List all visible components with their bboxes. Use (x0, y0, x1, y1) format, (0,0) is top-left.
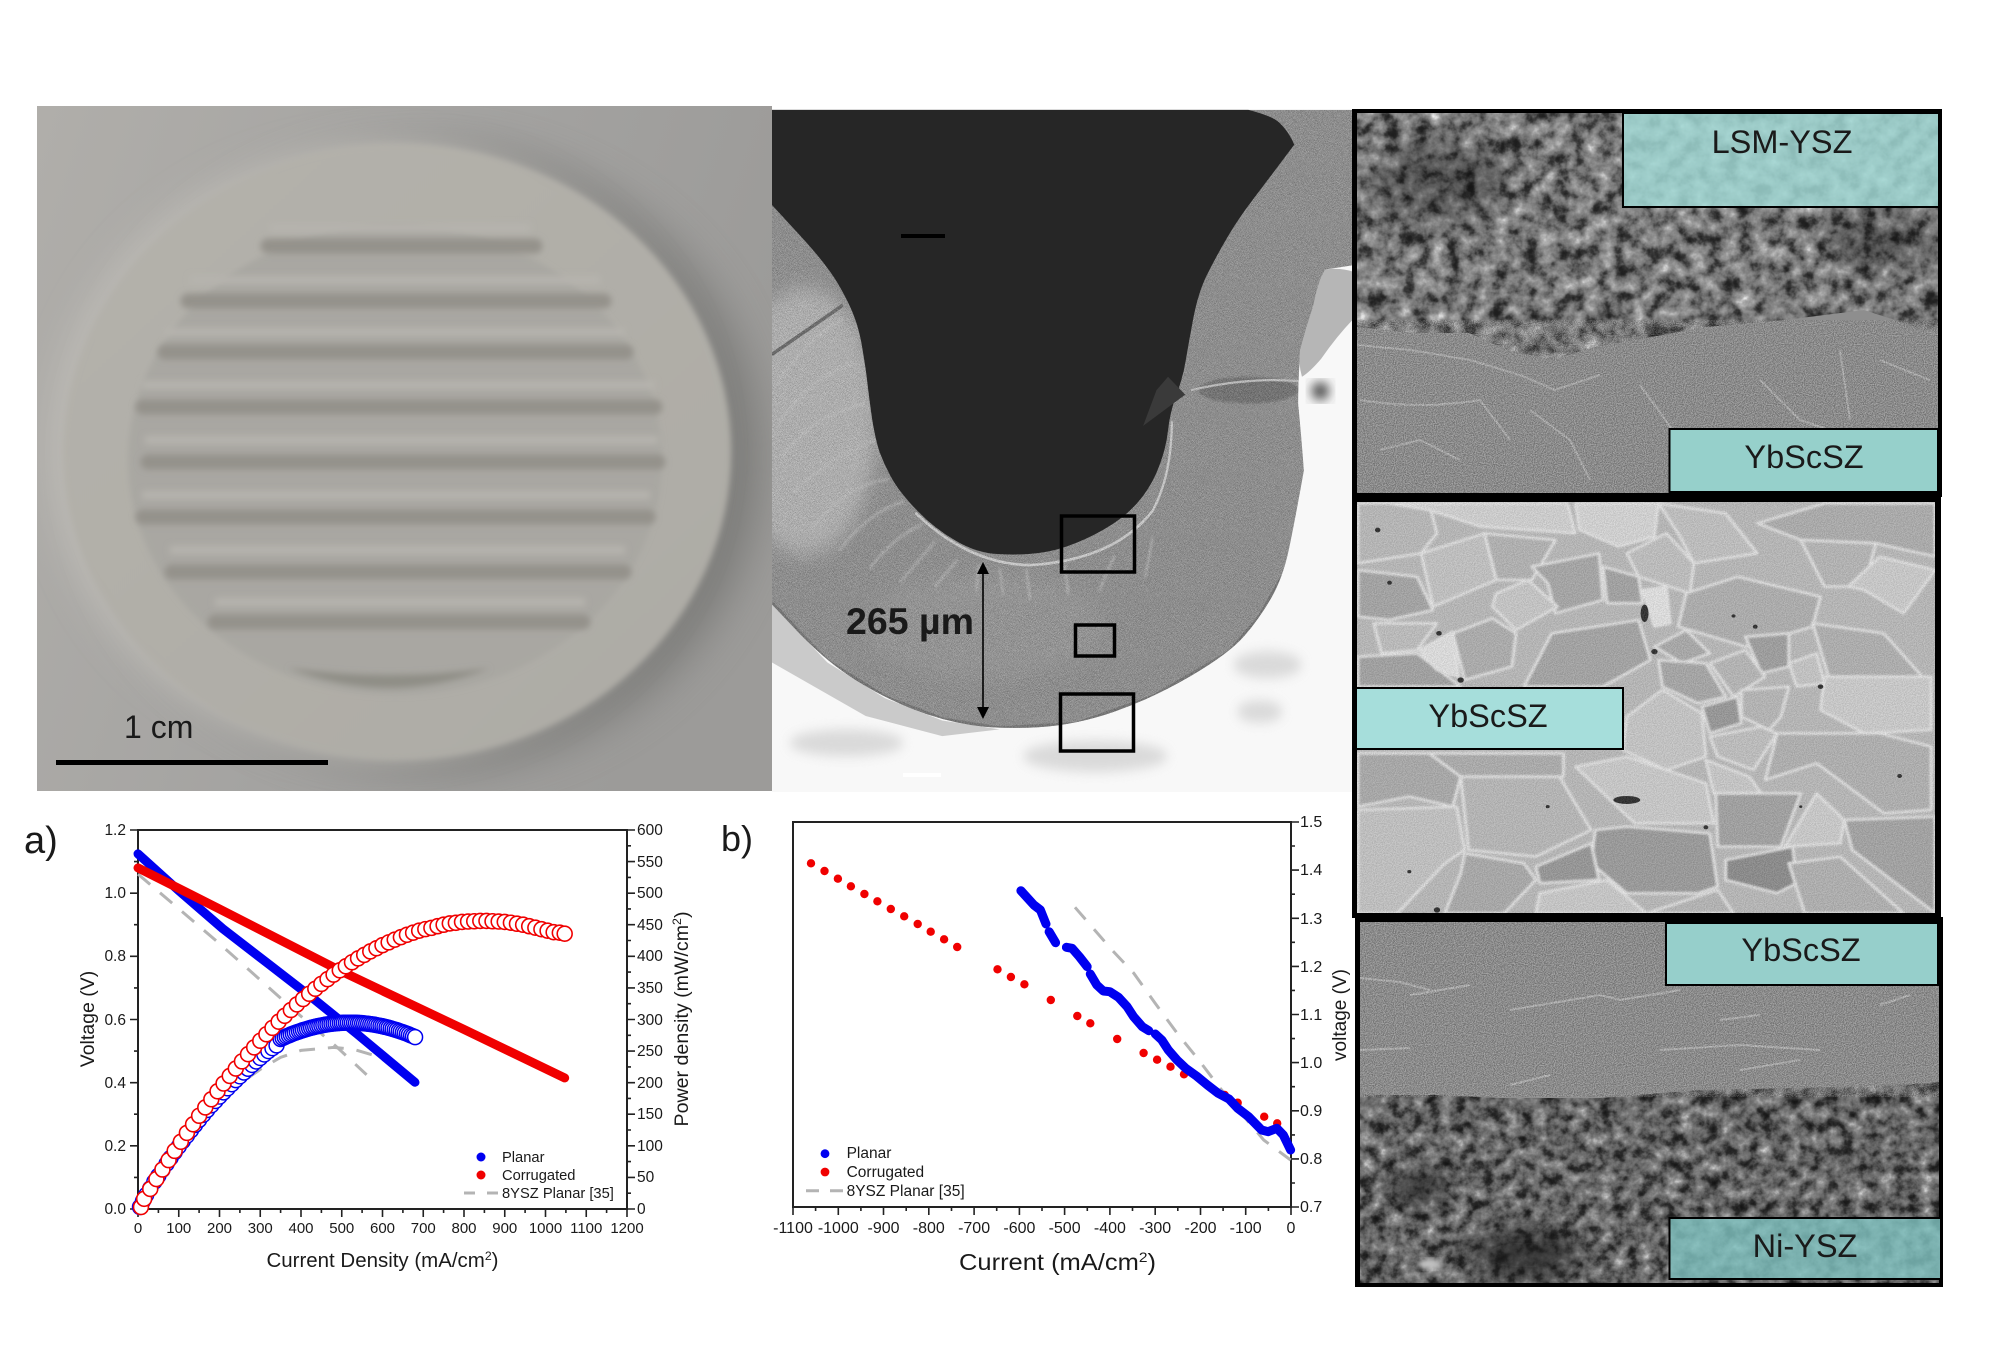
recessed corrugated area (128, 225, 662, 695)
bottom axis labels: 900 (492, 1220, 517, 1237)
gray dashed reference curve (1075, 907, 1291, 1160)
shadowed patches in cathode (1370, 140, 1935, 270)
right axis labels: 0.7 (1300, 1199, 1322, 1216)
bottom axis labels: -300 (1139, 1220, 1171, 1237)
right axis title: 2 (670, 918, 684, 925)
dark channel (772, 110, 1294, 554)
bottom axis labels (134, 1220, 644, 1237)
dense electrolyte (1357, 310, 1938, 493)
bottom axis labels: 100 (166, 1220, 191, 1237)
bottom axis labels: 500 (329, 1220, 354, 1237)
legend: Planar (502, 1150, 545, 1166)
bottom axis labels: 0 (134, 1220, 142, 1237)
right axis labels: 0 (637, 1201, 646, 1218)
thickness dimension arrow (977, 562, 989, 719)
brightening veil (1357, 502, 1935, 913)
disc left glow (45, 140, 715, 760)
corrugation grooves (143, 246, 658, 622)
label: YbScSZ middle: YbScSZ (1428, 698, 1548, 734)
charging spot (1311, 383, 1330, 399)
bright grains near anode base (1416, 1259, 1444, 1269)
left axis labels: 1.0 (104, 885, 126, 902)
thickness label: 265 µm (846, 600, 974, 642)
bottom axis title: 2 (485, 1249, 492, 1263)
red power curve (141, 921, 565, 1207)
data series (138, 854, 565, 1209)
right axis title: ) (672, 912, 693, 918)
right axis labels: 500 (637, 885, 663, 902)
chart b: voltage vs current (773, 814, 1351, 1275)
legend: 8YSZ Planar [35] (502, 1186, 614, 1202)
axis ticks (130, 830, 635, 1217)
right axis labels: 250 (637, 1043, 663, 1060)
right axis labels: 1.5 (1300, 814, 1322, 831)
bottom axis title: Current (mA/cm (959, 1249, 1121, 1275)
label: LSM-YSZ: LSM-YSZ (1712, 124, 1852, 160)
left axis labels: 0.0 (104, 1201, 126, 1218)
panel: YbScSZ / Ni-YSZ interface micrograph (1355, 917, 1943, 1287)
bottom axis labels: 0 (1287, 1220, 1296, 1237)
left axis labels (104, 822, 126, 1218)
right axis labels: 1.1 (1300, 1007, 1322, 1024)
scale bar (56, 760, 328, 765)
right axis labels: 150 (637, 1106, 663, 1123)
chart a: voltage and power density vs current density (77, 822, 693, 1272)
electrolyte lines (1360, 978, 1910, 1085)
left axis labels: 1.2 (104, 822, 126, 839)
blue power curve (140, 1023, 415, 1207)
dark pockets in anode (1392, 1176, 1579, 1277)
bottom axis labels: 1000 (529, 1220, 562, 1237)
left axis labels: 0.6 (104, 1012, 126, 1029)
bottom axis labels: 400 (288, 1220, 314, 1237)
left axis title: Voltage (V) (77, 971, 99, 1067)
heading: b): b) (721, 818, 753, 859)
scale label: 1 cm (124, 709, 193, 745)
right axis labels: 300 (637, 1012, 663, 1029)
right axis labels (637, 822, 663, 1218)
label: YbScSZ lower (1666, 923, 1938, 985)
fracture pores (1375, 528, 1902, 913)
right axis labels: 0.8 (1300, 1151, 1322, 1168)
legend (806, 1145, 965, 1200)
right axis labels: 600 (637, 822, 663, 839)
bottom axis labels: -600 (1003, 1220, 1036, 1237)
legend: Corrugated (502, 1168, 575, 1184)
bottom axis title: ) (492, 1250, 498, 1272)
label: Ni-YSZ: Ni-YSZ (1753, 1228, 1857, 1264)
bottom axis labels: -100 (1230, 1220, 1262, 1237)
axis ticks (793, 822, 1299, 1215)
fracture flake (1299, 269, 1354, 377)
panel: SEM cross-section of corrugation (732, 100, 1356, 792)
right axis labels: 200 (637, 1075, 663, 1092)
blue planar points (1021, 891, 1291, 1150)
polyhedral grains (1358, 503, 1935, 913)
inset marker boxes (1060, 516, 1134, 751)
right axis title: voltage (V) (1330, 969, 1351, 1061)
legend (464, 1150, 614, 1202)
right axis title: Power density (mW/cm (672, 931, 693, 1126)
right axis labels: 0.9 (1300, 1103, 1322, 1120)
label: YbScSZ lower: YbScSZ (1741, 932, 1861, 968)
black scale bar on SEM (901, 234, 945, 238)
label: LSM-YSZ (1623, 113, 1939, 207)
bottom axis labels: -800 (913, 1220, 945, 1237)
dark wedge (1143, 377, 1185, 426)
bottom groove (288, 668, 490, 688)
bottom axis title: 2 (1139, 1249, 1148, 1265)
bottom axis labels: 800 (451, 1220, 477, 1237)
right axis labels: 1.4 (1300, 862, 1322, 879)
right axis labels: 1.3 (1300, 911, 1322, 928)
right axis labels: 550 (637, 854, 663, 871)
label: YbScSZ upper: YbScSZ (1744, 439, 1864, 475)
bottom axis labels: 600 (370, 1220, 395, 1237)
bottom axis labels: -200 (1184, 1220, 1217, 1237)
gray dashed reference curves (138, 874, 374, 1209)
corrugation highlights (142, 228, 658, 602)
right axis labels (1300, 814, 1322, 1216)
electrolyte cracks (1357, 345, 1930, 480)
speckled lower-left strip (772, 604, 1000, 736)
bottom axis labels: -400 (1094, 1220, 1126, 1237)
bottom axis labels: -500 (1049, 1220, 1081, 1237)
left axis labels: 0.4 (104, 1075, 126, 1092)
bottom axis labels: -900 (867, 1220, 900, 1237)
background smudges (789, 651, 1302, 772)
panel: YbScSZ grain micrograph (1352, 497, 1941, 918)
bottom axis title: Current Density (mA/cm (266, 1250, 480, 1272)
panel: photograph of corrugated cell (37, 106, 772, 791)
label: Ni-YSZ (1670, 1218, 1941, 1279)
bottom axis labels: -1100 (773, 1220, 813, 1237)
bottom axis labels: 1100 (570, 1220, 602, 1237)
bottom axis labels: -700 (958, 1220, 990, 1237)
panel: LSM-YSZ / YbScSZ interface micrograph (1352, 109, 1942, 497)
right axis labels: 1.2 (1300, 959, 1322, 976)
plot frame (138, 830, 627, 1209)
bottom axis labels (773, 1220, 1296, 1237)
right axis labels: 1.0 (1300, 1055, 1322, 1072)
legend: Corrugated (847, 1164, 924, 1181)
label: YbScSZ middle (1356, 688, 1623, 749)
legend: Planar (847, 1145, 891, 1162)
right axis labels: 50 (637, 1169, 655, 1186)
dense electrolyte (1360, 922, 1939, 1098)
porous anode texture (1360, 1075, 1939, 1283)
blue voltage curve (138, 854, 415, 1082)
left axis labels: 0.2 (104, 1138, 126, 1155)
label: YbScSZ upper (1670, 429, 1938, 492)
bottom axis labels: -1000 (818, 1220, 859, 1237)
left axis labels: 0.8 (104, 948, 126, 965)
bottom axis labels: 700 (411, 1220, 436, 1237)
right axis labels: 450 (637, 917, 663, 934)
legend: 8YSZ Planar [35] (847, 1183, 965, 1200)
outer ring of disc (63, 144, 731, 760)
disc shadow (288, 131, 772, 784)
bottom axis labels: 1200 (610, 1220, 644, 1237)
porous cathode texture (1357, 113, 1938, 363)
red corrugated points (807, 859, 1281, 1128)
electrolyte body with shading and ripples (772, 110, 1352, 728)
bottom axis labels: 300 (248, 1220, 273, 1237)
right axis labels: 100 (637, 1138, 663, 1155)
red voltage curve (138, 868, 565, 1078)
plot frame (793, 822, 1291, 1207)
bottom axis title: ) (1147, 1249, 1156, 1275)
heading: a): a) (24, 820, 58, 862)
right axis labels: 400 (637, 948, 663, 965)
bottom axis labels: 200 (207, 1220, 232, 1237)
right axis labels: 350 (637, 980, 663, 997)
white scale bar on SEM (903, 773, 941, 777)
